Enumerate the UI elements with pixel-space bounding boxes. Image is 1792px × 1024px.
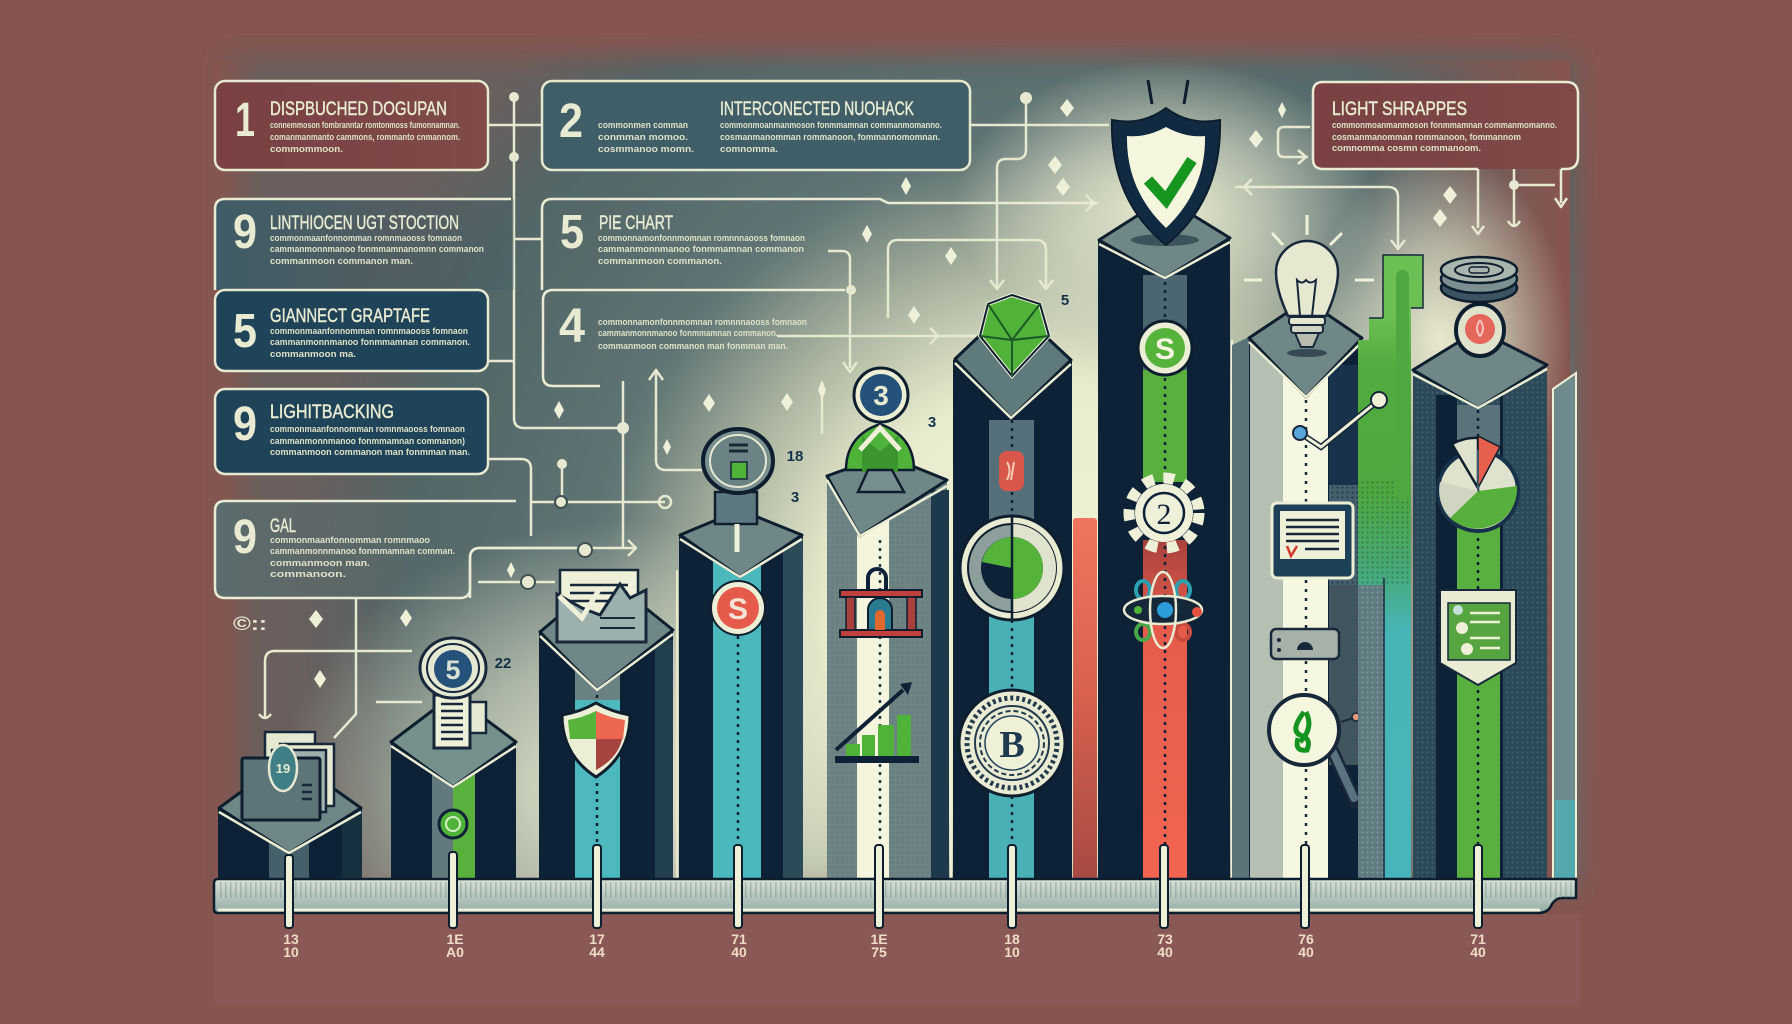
- salmon stripe: [1073, 518, 1097, 880]
- icon: quartered shield: [562, 703, 630, 777]
- text block: box 6: cammanmonnmanoo fonmmamnan commanon.: [270, 337, 470, 348]
- axis labels: 44: [589, 944, 605, 960]
- panel: box 8: [215, 501, 575, 598]
- icon: bitcoin medal: B: [999, 724, 1025, 766]
- background: [226, 44, 1588, 889]
- text block: pie chart: [598, 233, 805, 267]
- bar 7: [1098, 80, 1233, 880]
- text block: box 7: commanmoon commanon man fonmman man.: [270, 447, 470, 458]
- text block: box 2 right: comnomma.: [720, 144, 778, 155]
- text block: box 2 right: [720, 120, 942, 155]
- text block: box 2 right: cosmanmanomman rommanoon, fommannomomnan.: [720, 132, 940, 143]
- icon: red coin: [1456, 304, 1504, 356]
- text block: box 1: [270, 120, 460, 155]
- text block: pie chart: cammanmonnmanoo fonmmamnan commanon: [598, 244, 804, 255]
- bar 4: [679, 429, 803, 880]
- icon: shield with check: [1112, 80, 1220, 246]
- panel: box 4: [543, 290, 845, 386]
- bar 9: [1413, 257, 1576, 880]
- icon: pie chart: [1438, 436, 1518, 531]
- small glyph note: ©::: [233, 614, 267, 635]
- panel: box 3: [215, 199, 514, 290]
- icon: gear: [1129, 478, 1199, 548]
- icon: light bulb: [1244, 215, 1374, 357]
- panel: box 1: [215, 81, 488, 170]
- axis labels: [283, 931, 1486, 960]
- icon: numbered badge with documents: 5: [445, 655, 461, 685]
- side panel: [1553, 373, 1576, 880]
- icon: bitcoin medal: [959, 690, 1065, 796]
- text block: pie chart: commonnamonfonnmomnan romnnnaooss fomnaon: [598, 233, 805, 244]
- number 4: 4: [559, 300, 585, 353]
- label 3: 3: [791, 489, 799, 506]
- icon: magnifier with symbol: [1269, 695, 1360, 802]
- axis labels: 40: [1470, 944, 1486, 960]
- text block: box 3: commonmaanfonnomman romnmaooss fomnaon: [270, 233, 462, 244]
- axis labels: 73: [1157, 931, 1173, 947]
- text block: box 8: commanoon.: [270, 569, 346, 580]
- icon: folders with coin: [242, 732, 334, 820]
- axis labels: 1E: [870, 931, 888, 947]
- bar 2 cap: [391, 695, 516, 787]
- icon: document with trend: [557, 570, 646, 642]
- icon: green coin: [439, 810, 467, 838]
- text block: box 4: cammanmonnmanoo fonmmamnan commanon.: [598, 328, 778, 339]
- text block: light sharpes: cosmanmanomman rommanoon, fommannom: [1332, 132, 1521, 143]
- axis labels: 10: [1004, 944, 1020, 960]
- text block: box 3: commanmoon commanon man.: [270, 256, 413, 267]
- icon: red dollar coin: S: [728, 593, 748, 626]
- icon: numbered badge and green gem: 3: [873, 380, 889, 411]
- icon: numbered badge and green gem: [846, 368, 914, 492]
- text block: box 4: commanmoon commanon man fonmman man.: [598, 341, 788, 352]
- bar 1: [218, 757, 362, 880]
- text block: box 3: cammanmonnmanoo fonmmamnanomnn commanon: [270, 244, 484, 255]
- axis labels: 76: [1298, 931, 1314, 947]
- icon: tagged checklist: [1440, 590, 1516, 685]
- text block: light sharpes: [1332, 120, 1557, 154]
- text block: box 2 left: cosmmanoo momn.: [598, 144, 694, 155]
- text block: box 1: comanmanmanto cammons, rommanto cnmannom.: [270, 132, 460, 143]
- label 22: 22: [495, 655, 511, 672]
- text block: box 7: cammanmonnmanoo fonmmamnan commanon): [270, 436, 465, 447]
- bar 1 cap: [219, 757, 361, 853]
- axis labels: 71: [731, 931, 747, 947]
- icon: rising chart: [835, 682, 919, 763]
- bar 8 cap: [1249, 300, 1362, 397]
- panel: box 7: [215, 389, 488, 474]
- text block: box 6: commanmoon ma.: [270, 349, 356, 360]
- number 1: 1: [235, 94, 255, 147]
- label 3: 3: [928, 414, 936, 431]
- heading: box 2: INTERCONECTED NUOHACK: [720, 99, 914, 120]
- bar 3 cap: [540, 576, 673, 690]
- axis ruler: [214, 879, 1576, 913]
- text block: box 2 left: [598, 120, 694, 155]
- axis labels: A0: [446, 944, 464, 960]
- panel: box 6: [215, 290, 488, 371]
- connector lines and arrows: [259, 92, 1567, 738]
- icon: numbered badge with documents: [420, 638, 486, 748]
- heading: pie chart: PIE CHART: [599, 213, 673, 234]
- text block: box 1: commommoon.: [270, 144, 343, 155]
- text block: box 4: [598, 317, 807, 352]
- heading: box 6: GIANNECT GRAPTAFE: [270, 306, 430, 327]
- panel: box 2: [542, 81, 970, 170]
- text block: box 2 right: commonmoanmanmoson fonmmamnan commanmomanno.: [720, 120, 942, 131]
- label 5: 5: [1061, 292, 1069, 309]
- axis labels: 40: [1298, 944, 1314, 960]
- number 5: 5: [560, 206, 584, 259]
- heading: box 1: DISPBUCHED DOGUPAN: [270, 99, 447, 120]
- icon: green dollar coin: [1138, 321, 1192, 375]
- icon: red tag: [999, 451, 1024, 491]
- text block: box 2 left: commonmen comman: [598, 120, 688, 131]
- axis labels: 18: [1004, 931, 1020, 947]
- icon: magnifier with chart: [703, 429, 773, 552]
- icon: folders with coin: 19: [276, 761, 290, 776]
- label 18: 18: [787, 448, 803, 465]
- text block: box 8: commanmoon man.: [270, 558, 370, 569]
- text block: light sharpes: commonmoanmanmoson fonmmamnan commanmomanno.: [1332, 120, 1557, 131]
- axis labels: 40: [1157, 944, 1173, 960]
- text block: pie chart: commanmoon commanon.: [598, 256, 722, 267]
- number 9: 9: [233, 398, 257, 451]
- panel: box 5 pie chart: [542, 199, 1095, 290]
- bar 9 cap: [1413, 330, 1547, 408]
- icon: red dollar coin: [711, 581, 765, 635]
- axis labels: 75: [871, 944, 887, 960]
- axis labels: 17: [589, 931, 605, 947]
- text block: light sharpes: comnomma cosmn commanoom.: [1332, 143, 1481, 154]
- panel: light sharpes: [1313, 82, 1578, 169]
- bar 4 cap: [680, 510, 802, 577]
- green column with line chart: [1293, 255, 1423, 880]
- text block: box 6: commonmaanfonnomman romnmaooss fomnaon: [270, 326, 468, 337]
- axis labels: 10: [283, 944, 299, 960]
- number 9: 9: [233, 206, 257, 259]
- heading: box 3: LINTHIOCEN UGT STOCTION: [270, 213, 459, 234]
- bar 5 cap: [827, 455, 947, 536]
- icon: gear: 2: [1156, 498, 1172, 531]
- axis labels: 71: [1470, 931, 1486, 947]
- icon: coin stack: [1441, 257, 1517, 302]
- heading: box 7: LIGHITBACKING: [270, 402, 394, 423]
- icon: green dollar coin: S: [1155, 333, 1175, 366]
- text block: box 2 left: conmman momoo.: [598, 132, 688, 143]
- text block: box 8: commonmaanfonnomman romnmaoo: [270, 535, 430, 546]
- text block: box 7: commonmaanfonnomman romnmaooss fomnaon: [270, 424, 465, 435]
- axis labels: 40: [731, 944, 747, 960]
- number 5: 5: [233, 305, 257, 358]
- icon: atom: [1124, 572, 1202, 648]
- bar 5: [827, 368, 949, 880]
- sparkle diamonds: [309, 99, 1457, 688]
- bar 3: [539, 570, 678, 880]
- text block: box 4: commonnamonfonnmomnan romnnnaooss fomnaon: [598, 317, 807, 328]
- text block: box 8: [270, 535, 455, 580]
- icon: green gem: [980, 295, 1049, 376]
- axis labels: 13: [283, 931, 299, 947]
- bar 6: [950, 292, 1072, 880]
- number 9: 9: [233, 511, 257, 564]
- text block: box 7: [270, 424, 470, 458]
- text block: box 1: connemmoson fombranntar romtonmoss fumonnamnan.: [270, 120, 460, 131]
- icon: gate with lock: [840, 569, 922, 637]
- line chart: [1293, 392, 1387, 447]
- heading: box 8: GAL: [270, 516, 296, 537]
- icon: small device: [1271, 629, 1339, 659]
- heading: light sharpes: LIGHT SHRAPPES: [1332, 99, 1467, 120]
- axis pins: [285, 845, 1482, 928]
- text block: box 3: [270, 233, 484, 267]
- bar 7 cap: [1099, 198, 1230, 278]
- icon: target ring: [960, 516, 1064, 620]
- bar 6 cap: [955, 305, 1071, 418]
- icon: document card: [1272, 503, 1353, 578]
- bar 2: [391, 695, 516, 880]
- number 2: 2: [559, 95, 583, 148]
- text block: box 6: [270, 326, 470, 360]
- text block: box 8: cammanmonnmanoo fonmmamnan comman.: [270, 546, 455, 557]
- axis labels: 1E: [446, 931, 464, 947]
- bar 8: [1232, 215, 1374, 880]
